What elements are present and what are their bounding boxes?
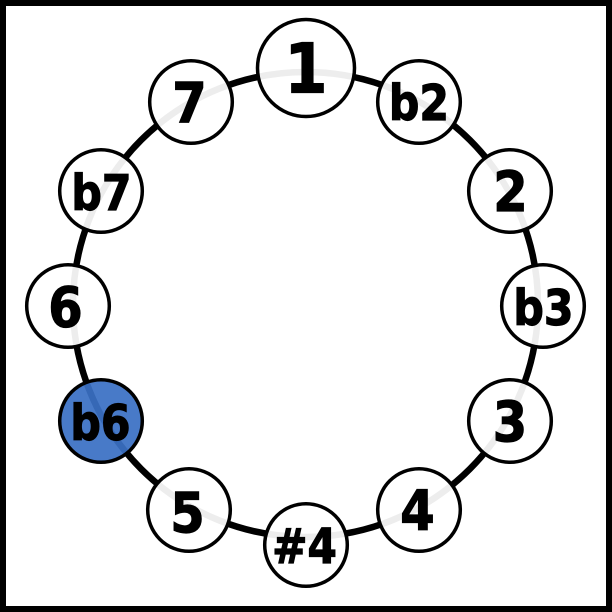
node: b7: b7 [71, 164, 132, 222]
node: b3 [502, 265, 584, 347]
node: b2 [378, 61, 460, 143]
node: 7 [150, 61, 232, 143]
node: 6: 6 [48, 276, 83, 340]
node: #4: #4 [272, 518, 337, 575]
node: 4 [378, 469, 460, 551]
node: b6 highlighted [60, 380, 142, 462]
node: 3: 3 [493, 391, 527, 455]
node: b2: b2 [389, 74, 449, 132]
node: #4 [265, 504, 347, 586]
node: b7 [60, 150, 142, 232]
node: 4: 4 [400, 480, 435, 544]
node: b3: b3 [513, 279, 574, 337]
node: 2 [469, 150, 551, 232]
node: 7: 7 [172, 72, 207, 136]
connecting ring [73, 72, 538, 537]
node: b6 highlighted: b6 [70, 394, 131, 452]
node: 5: 5 [170, 482, 205, 546]
node: 5 [148, 469, 230, 551]
node: 3 [469, 380, 551, 462]
node: 1 [258, 20, 354, 116]
node: 1: 1 [284, 29, 328, 109]
node: 2: 2 [493, 161, 528, 225]
node: 6 [27, 265, 109, 347]
